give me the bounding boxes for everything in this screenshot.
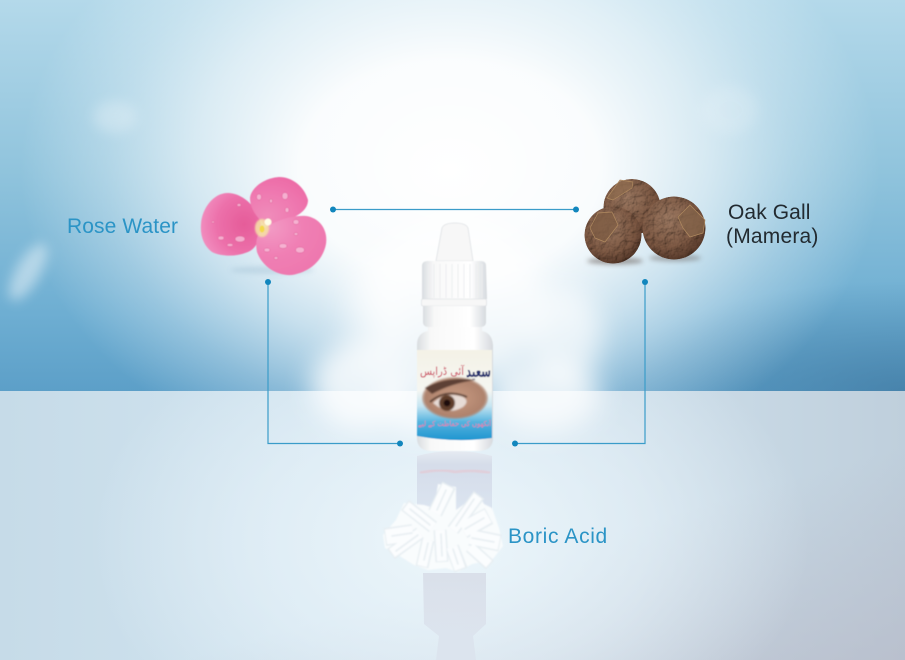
product name in Urdu: آئی ڈراپس [420,364,465,378]
left petal [201,193,261,256]
water droplets [212,192,304,260]
eye illustration [422,377,488,419]
connector: rose water to bottle [265,279,403,446]
label: boric acid: Boric Acid [508,525,608,548]
left nut [584,206,642,264]
bottle reflection [417,451,492,660]
bottle body [417,327,493,451]
top nut [604,179,660,235]
crystal prism outlines [385,485,500,570]
bottle cap [422,261,487,327]
right nut [642,196,706,260]
brand name in Urdu: سعید [466,362,491,382]
crystal prism ridges [392,490,494,564]
background: reflective floor [0,391,905,660]
connector: rose water to oak gall [330,206,579,212]
connector: oak gall to bottle [512,279,648,446]
label: rose water: Rose Water [67,215,178,238]
top petal [250,177,308,226]
bottle nozzle [436,223,473,261]
background: sky [0,0,905,392]
bottle [417,223,493,451]
icon: rose petals [201,177,326,275]
label: oak gall (mamera): Oak Gall [728,201,810,224]
label small print in Urdu: آنکھوں کی حفاظت کے لیے [418,419,492,428]
mist around bottle [312,220,601,435]
icon: boric acid crystals [383,484,503,572]
bottle label [417,350,492,440]
label: oak gall (mamera): (Mamera) [726,225,819,248]
icon: oak galls [584,179,706,264]
right petal [256,216,326,275]
crystal prism faces [386,486,499,569]
